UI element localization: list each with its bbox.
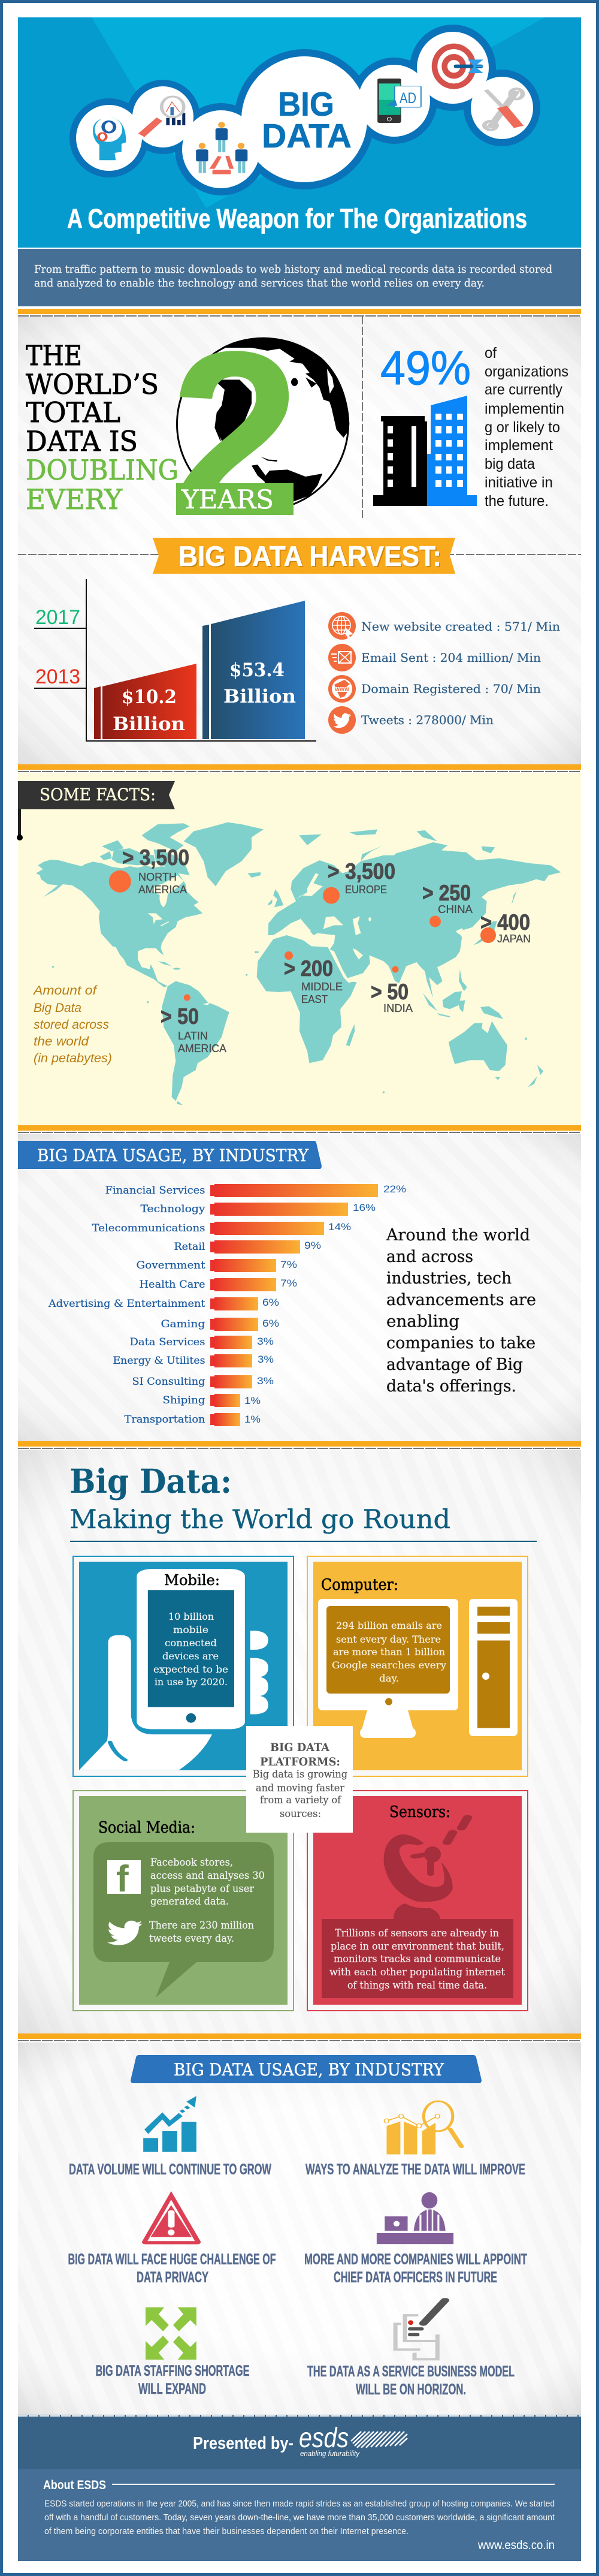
logo: esds: esds	[299, 2422, 349, 2453]
stat: 49%: 49%	[380, 341, 471, 394]
card: computer: Google searches every	[332, 1659, 446, 1671]
bar chart: industries: Technology	[140, 1203, 205, 1215]
panel: about esds: ESDS started operations in the year 2005, and has since then made rapid strides as an established group of hosting companies. We started	[44, 2499, 555, 2509]
card: computer	[307, 1556, 528, 1776]
title: big data: DATA	[262, 117, 352, 155]
card: sensors: Trillions of sensors are already in	[335, 1927, 499, 1939]
text: around the world	[386, 1226, 536, 1396]
logo: esds	[299, 2422, 407, 2458]
icon: domain www: WWW	[335, 686, 349, 692]
card: sensors	[307, 1791, 528, 2011]
panel: doubling and harvest background	[18, 309, 581, 764]
note: amount of big data: Amount of	[32, 984, 98, 998]
icon: documents and pen	[395, 2300, 445, 2359]
panel: intro text: and analyzed to enable the technology and services that the world relies on every day.	[34, 277, 485, 290]
world map: europe asia africa oceania	[255, 829, 561, 1093]
icon: monitor and tower	[318, 1599, 518, 1738]
ad label: AD	[400, 90, 416, 107]
text: 49% description: organizations	[485, 363, 568, 380]
social media facts: tweets every day.	[149, 1933, 234, 1945]
caption: chief data officers: CHIEF DATA OFFICERS IN FUTURE	[334, 2269, 497, 2286]
card: social media: Social Media:	[98, 1819, 195, 1837]
icon: magnifier with chart	[138, 97, 185, 137]
bar chart: industries: 9%	[304, 1240, 321, 1251]
banner: big data harvest	[18, 538, 581, 574]
icon: twitter bird	[107, 1921, 143, 1945]
speech bubble	[93, 1842, 274, 1997]
note: amount of big data: Big Data	[34, 1001, 81, 1015]
panel: about esds: www.esds.co.in	[477, 2539, 555, 2552]
callout: big data platforms: from a variety of	[260, 1794, 342, 1806]
map labels: EUROPE	[345, 884, 387, 896]
ribbon: usage heading	[18, 1141, 322, 1169]
card: mobile: expected to be	[153, 1664, 228, 1675]
bar chart: industries: Shiping	[163, 1394, 205, 1406]
note: amount of big data	[32, 984, 112, 1065]
icon: globe	[177, 338, 349, 510]
ribbon: usage heading: BIG DATA USAGE, BY INDUSTRY	[37, 1146, 308, 1165]
bar chart: industries	[48, 1183, 406, 1426]
heading: the world's total data is doubling every: DATA IS	[26, 425, 138, 457]
social media facts: Facebook stores,	[150, 1857, 233, 1869]
panel: about esds	[18, 2469, 581, 2561]
bar: 2013 value	[94, 664, 196, 739]
map labels: > 50	[371, 980, 409, 1004]
card: computer: day.	[379, 1673, 399, 1684]
text: around the world: enabling	[386, 1312, 459, 1331]
caption: privacy: DATA PRIVACY	[137, 2269, 208, 2286]
card: computer: Computer:	[321, 1576, 398, 1594]
icon: email	[328, 644, 356, 671]
icon: phone with ad bubble	[377, 79, 421, 123]
text: around the world: industries, tech	[386, 1269, 512, 1288]
card: sensors: with each other populating internet	[329, 1966, 505, 1978]
text: around the world: advancements are	[386, 1291, 536, 1309]
list: data harvest per minute	[328, 612, 560, 734]
caption: chief data officers	[304, 2251, 527, 2286]
icon: growth chart	[143, 2096, 196, 2152]
bar chart: industries: Advertising & Entertainment	[48, 1298, 205, 1310]
text: 49% description: g or likely to	[485, 419, 560, 436]
heading: the world's total data is doubling every: THE	[26, 339, 82, 372]
heading: big data making the world go round	[69, 1462, 450, 1535]
caption: data as a service: WILL BE ON HORIZON.	[356, 2381, 466, 2398]
callout: big data platforms: Big data is growing	[253, 1768, 347, 1780]
harvest rates text: New website created : 571/ Min	[361, 619, 560, 634]
bar chart: industries: 1%	[244, 1395, 261, 1406]
icon: wrench and screwdriver	[485, 89, 523, 130]
bar chart: industries: Gaming	[161, 1318, 205, 1330]
text: 49% description: big data	[485, 456, 535, 472]
map labels: EAST	[301, 993, 328, 1005]
card: sensors: monitors tracks and communicate	[334, 1953, 501, 1965]
card: social media	[73, 1791, 294, 2011]
bar chart: industries: 7%	[280, 1278, 297, 1289]
panel: about esds: of them being corporate entities that have their businesses dependent on their Internet presence.	[44, 2526, 409, 2536]
panel: presented by	[18, 2415, 581, 2469]
heading: big data making the world go round: Making the World go Round	[69, 1505, 450, 1535]
heading: the world's total data is doubling every: WORLD’S	[26, 368, 159, 400]
text: around the world: Around the world	[386, 1226, 530, 1245]
card: mobile: Mobile:	[164, 1572, 220, 1589]
bar chart: industries: Telecommunications	[92, 1222, 205, 1234]
text: 49% description: implementin	[485, 400, 564, 417]
bar chart: industries: 3%	[257, 1375, 274, 1387]
map labels: AMERICA	[178, 1043, 226, 1054]
text: 49% description: implement	[485, 437, 553, 454]
text: 49% description	[485, 345, 568, 510]
bar: 2017 value	[202, 601, 305, 739]
icon: satellite dish	[384, 1818, 468, 1919]
map labels: > 250	[422, 881, 471, 905]
panel: intro text: From traffic pattern to music downloads to web history and medical records data is recorded stored	[34, 263, 552, 276]
data points	[109, 870, 496, 1001]
panel: future trends	[18, 2033, 581, 2415]
map labels	[122, 845, 531, 1054]
card: mobile: 10 billion	[168, 1611, 214, 1622]
text: 49% description: are currently	[485, 381, 562, 398]
panel: presented by: Presented by-	[193, 2434, 294, 2453]
note: amount of big data: (in petabytes)	[34, 1052, 112, 1065]
panel: about esds: About ESDS	[43, 2478, 106, 2492]
logo: esds: enabling futurability	[300, 2449, 360, 2458]
panel: usage by industry	[18, 1125, 581, 1441]
bar chart: industries: Data Services	[129, 1336, 205, 1348]
card: computer: 294 billion emails are	[336, 1620, 442, 1631]
bar: 2013 value: Billion	[113, 713, 185, 735]
card: mobile: mobile	[173, 1624, 208, 1635]
caption: staffing shortage: BIG DATA STAFFING SHORTAGE	[96, 2363, 249, 2379]
card: mobile: connected	[165, 1637, 217, 1649]
bar chart: industries: 6%	[262, 1318, 279, 1329]
ribbon: some facts: SOME FACTS:	[40, 785, 156, 805]
callout: big data platforms: PLATFORMS:	[260, 1755, 340, 1768]
bar chart: industries: Government	[137, 1260, 205, 1272]
social media facts: plus petabyte of user	[150, 1883, 255, 1895]
icon: hand holding phone	[79, 1569, 268, 1770]
card: mobile	[73, 1556, 294, 1776]
note: amount of big data: the world	[34, 1035, 89, 1049]
caption: data as a service	[307, 2363, 515, 2398]
text: 49% description: initiative in	[485, 474, 553, 491]
note: amount of big data: stored across	[34, 1018, 109, 1032]
map labels: NORTH	[138, 871, 177, 883]
map labels: > 200	[284, 956, 333, 981]
callout: big data platforms: BIG DATA	[270, 1741, 329, 1754]
bar chart: industries: 3%	[257, 1336, 274, 1347]
bar chart: industries: Retail	[174, 1241, 205, 1253]
map labels: MIDDLE	[301, 981, 343, 993]
icon: head with gears	[93, 117, 126, 160]
cloud of circles	[69, 25, 540, 195]
icon: buildings	[373, 396, 477, 506]
social media facts: access and analyses 30	[150, 1870, 265, 1882]
title: big data	[262, 85, 352, 155]
text: around the world: data's offerings.	[386, 1377, 516, 1396]
social media facts: There are 230 million	[149, 1920, 254, 1932]
icon: target with arrow	[432, 44, 483, 89]
card: sensors: of things with real time data.	[347, 1980, 487, 1991]
bar chart: industries: 6%	[262, 1297, 279, 1308]
card: sensors: Sensors:	[389, 1803, 450, 1821]
harvest rates text	[361, 619, 560, 727]
map labels: LATIN	[178, 1030, 208, 1042]
card: computer: sent every day. There	[336, 1634, 441, 1645]
bar chart: industries: 1%	[244, 1414, 261, 1425]
map labels: CHINA	[438, 903, 473, 915]
banner: big data harvest: BIG DATA HARVEST:	[179, 540, 441, 572]
card: computer: are more than 1 billion	[333, 1646, 445, 1658]
bar chart: industries: Energy & Utilites	[113, 1355, 205, 1367]
big number 2 years: 2	[170, 303, 301, 565]
icon: twitter	[328, 706, 356, 734]
harvest rates text: Tweets : 278000/ Min	[361, 713, 494, 727]
icon: facebook	[107, 1858, 141, 1900]
bar chart: industries: Transportation	[125, 1414, 205, 1426]
panel: making the world go round	[18, 1441, 581, 2033]
harvest rates text: Email Sent : 204 million/ Min	[361, 650, 541, 665]
bar: 2017 value: Billion	[223, 686, 296, 707]
panel: intro text	[18, 248, 581, 306]
heading: the world's total data is doubling every	[26, 339, 179, 516]
callout: big data platforms: sources:	[280, 1808, 321, 1820]
heading: big data making the world go round: Big Data:	[69, 1462, 232, 1501]
callout: big data platforms	[246, 1726, 353, 1833]
ribbon: some facts	[17, 781, 175, 840]
bar chart: industries: 7%	[280, 1259, 297, 1270]
callout: big data platforms: and moving faster	[256, 1782, 345, 1794]
title: big data: BIG	[278, 85, 334, 123]
panel: some facts map	[17, 764, 581, 1125]
chart: market growth 2013 to 2017: 2013	[35, 665, 80, 688]
icon: website globe	[328, 612, 356, 640]
bar: 2013 value: $10.2	[122, 686, 177, 708]
text: around the world: companies to take	[386, 1334, 536, 1352]
icon: warning triangle	[142, 2191, 201, 2244]
bar chart: industries: 14%	[328, 1221, 351, 1233]
map labels: INDIA	[383, 1002, 413, 1014]
map labels: > 400	[480, 910, 530, 935]
bar chart: industries: Financial Services	[105, 1185, 205, 1197]
bar chart: industries: 16%	[353, 1202, 376, 1213]
bar chart: industries: Health Care	[139, 1279, 205, 1291]
icon: domain www	[328, 675, 356, 703]
text: around the world: advantage of Big	[386, 1355, 523, 1374]
caption: staffing shortage: WILL EXPAND	[138, 2381, 206, 2397]
map labels: > 3,500	[328, 859, 395, 884]
text: 49% description: of	[485, 345, 497, 361]
chart: market growth 2013 to 2017	[34, 579, 316, 741]
bar chart: industries: 3%	[258, 1354, 274, 1365]
icon: facebook: f	[116, 1858, 129, 1900]
card: sensors: place in our environment that built,	[331, 1941, 504, 1953]
caption: privacy	[68, 2251, 276, 2286]
big number 2 years: YEARS	[181, 485, 274, 515]
bar chart: industries: SI Consulting	[132, 1376, 205, 1388]
map labels: > 3,500	[122, 845, 189, 870]
icon: chief data officer	[377, 2192, 453, 2244]
world map: americas	[36, 822, 264, 1105]
ribbon: trends heading	[131, 2055, 482, 2083]
caption: staffing shortage	[96, 2363, 249, 2397]
harvest rates text: Domain Registered : 70/ Min	[361, 682, 541, 696]
banner: big data harvest: BIG DATA HARVEST:	[180, 541, 443, 573]
panel: header banner	[18, 17, 581, 248]
map labels: JAPAN	[497, 933, 531, 945]
card: mobile: devices are	[162, 1650, 219, 1662]
heading: the world's total data is doubling every: TOTAL	[26, 396, 120, 429]
icon: analyze magnifier	[385, 2101, 461, 2155]
caption: data volume: DATA VOLUME WILL CONTINUE TO GROW	[69, 2161, 271, 2178]
text: 49% description: the future.	[485, 493, 549, 510]
social media facts	[149, 1857, 265, 1945]
chart: market growth 2013 to 2017: 2017	[35, 606, 80, 629]
social media facts: generated data.	[150, 1896, 229, 1908]
icon: expanding arrows	[146, 2307, 196, 2360]
heading: the world's total data is doubling every: DOUBLING	[26, 454, 179, 486]
caption: privacy: BIG DATA WILL FACE HUGE CHALLENGE OF	[68, 2251, 276, 2268]
bar: 2017 value: $53.4	[229, 659, 285, 681]
icon: three people	[196, 122, 247, 174]
bar chart: industries: 22%	[383, 1183, 406, 1195]
map labels: > 50	[161, 1004, 199, 1029]
ribbon: trends heading: BIG DATA USAGE, BY INDUSTRY	[174, 2060, 444, 2080]
heading: the world's total data is doubling every: EVERY	[26, 483, 123, 516]
map labels: AMERICA	[138, 884, 187, 896]
panel: about esds: off with a handful of customers. Today, seven years down-the-line, we have more than 35,000 customers worldwide, a significant amount	[44, 2512, 555, 2523]
text: around the world: and across	[386, 1248, 473, 1266]
card: mobile: in use by 2020.	[155, 1676, 228, 1688]
